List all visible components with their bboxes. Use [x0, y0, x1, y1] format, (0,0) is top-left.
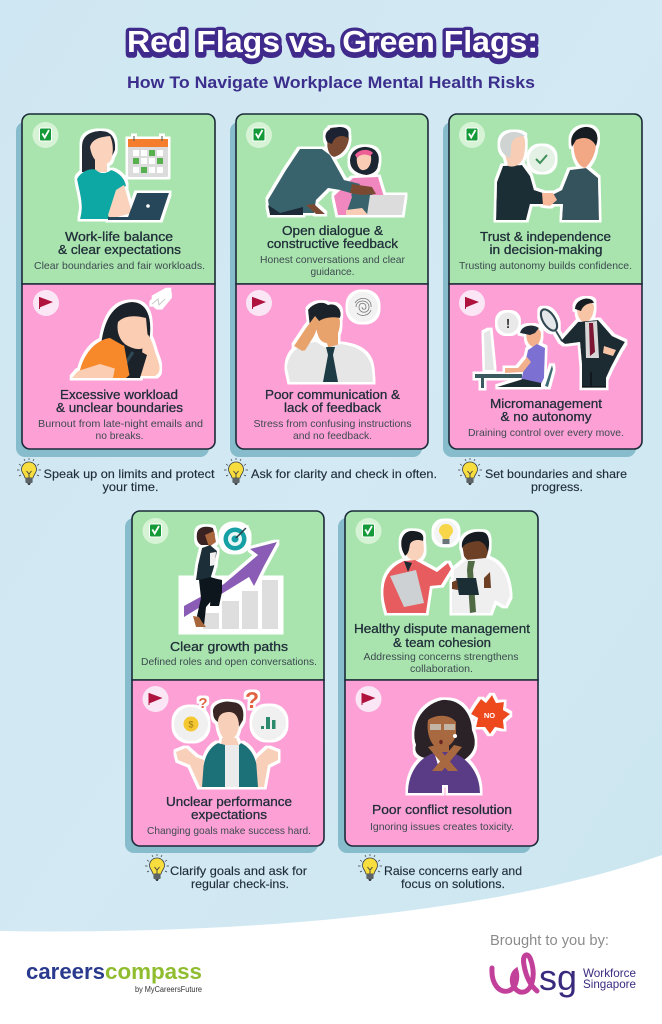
white footer wave — [0, 855, 662, 1024]
icon: red flag — [142, 686, 168, 712]
heading: lack of feedback — [284, 400, 382, 415]
illustration: colleague giving feedback — [268, 127, 405, 215]
tip: clarify goals — [145, 854, 307, 891]
logo: Workforce Singapore: sg — [539, 957, 577, 998]
tip: protect your time — [17, 458, 215, 494]
heading: Excessive workload — [60, 387, 178, 402]
icon: red flag — [33, 290, 59, 316]
illustration: manager with magnifier over worker — [475, 298, 625, 388]
illustration: shrugging man with question marks: ? — [198, 695, 208, 712]
heading — [480, 229, 611, 257]
logo: Careers Compass: by MyCareersFuture — [135, 985, 202, 994]
heading: Work-life balance — [65, 229, 173, 244]
heading — [490, 396, 602, 424]
description: collaboration. — [410, 663, 473, 675]
heading: Open dialogue & — [282, 223, 383, 238]
illustration: woman at laptop with calendar — [77, 131, 169, 220]
heading: & no autonomy — [500, 409, 592, 424]
heading: & unclear boundaries — [56, 400, 184, 415]
heading: Healthy dispute management — [354, 621, 530, 636]
description — [364, 651, 518, 675]
illustration: exhausted woman — [72, 294, 168, 378]
illustration: confused man with thought bubble — [287, 292, 378, 382]
tip: clarify goals: Clarify goals and ask for — [170, 864, 307, 878]
description — [38, 418, 203, 442]
heading: Poor communication & — [265, 387, 400, 402]
heading — [267, 223, 399, 251]
description: Stress from confusing instructions — [254, 418, 412, 430]
illustration: handshake between colleagues — [496, 127, 599, 220]
tip: ask for clarity — [224, 458, 437, 485]
icon: green check — [459, 122, 485, 148]
description: no breaks. — [96, 430, 144, 442]
tip: set boundaries: progress. — [531, 480, 583, 494]
heading: constructive feedback — [267, 236, 399, 251]
heading: Micromanagement — [490, 396, 602, 411]
illustration: shrugging man with question marks — [174, 687, 286, 787]
heading — [265, 387, 400, 415]
icon: green check — [142, 518, 168, 544]
sponsor label: Brought to you by: — [490, 932, 609, 949]
tip: ask for clarity: Ask for clarity and check in often. — [251, 467, 437, 481]
icon: green check — [32, 122, 58, 148]
icon: red flag — [246, 290, 272, 316]
heading: Trust & independence — [480, 229, 611, 244]
description: Ignoring issues creates toxicity. — [370, 821, 514, 833]
heading: Poor conflict resolution — [372, 802, 512, 817]
illustration: shrugging man with question marks: ? — [245, 687, 259, 713]
description — [254, 418, 412, 442]
description: Clear boundaries and fair workloads. — [34, 260, 205, 272]
heading — [166, 794, 292, 822]
panel: healthy dispute management vs poor conflict resolution — [338, 511, 538, 853]
panel: open dialogue vs poor communication — [230, 114, 428, 457]
heading: & clear expectations — [58, 242, 182, 257]
illustration: woman crossing arms saying no — [408, 695, 510, 793]
logo: Careers Compass — [26, 959, 202, 994]
heading: Clear growth paths — [170, 639, 289, 654]
description: Addressing concerns strengthens — [364, 651, 518, 663]
heading — [56, 387, 184, 415]
description: guidance. — [310, 266, 354, 278]
illustration: woman climbing growth chart — [181, 524, 281, 632]
tip: set boundaries — [458, 458, 627, 494]
illustration: manager with magnifier over worker: ! — [506, 316, 510, 331]
logo: Careers Compass: compass — [105, 959, 202, 984]
heading: & team cohesion — [393, 635, 491, 650]
panel: trust vs micromanagement — [443, 114, 642, 457]
illustration: two colleagues talking with light bulb — [383, 521, 510, 613]
description: Changing goals make success hard. — [147, 825, 311, 837]
tip: protect your time: your time. — [102, 480, 158, 494]
tip: clarify goals: regular check-ins. — [191, 877, 289, 891]
subtitle: How To Navigate Workplace Mental Health Risks — [127, 73, 535, 92]
logo: Careers Compass: careers — [26, 959, 105, 984]
heading — [354, 621, 530, 650]
heading — [58, 229, 182, 257]
heading: Unclear performance — [166, 794, 292, 809]
heading: expectations — [191, 807, 268, 822]
panel: work-life balance vs excessive workload — [16, 114, 215, 457]
description — [260, 254, 405, 278]
icon: red flag — [459, 290, 485, 316]
icon: green check — [246, 122, 272, 148]
illustration: shrugging man with question marks: $ — [188, 720, 194, 730]
description: Honest conversations and clear — [260, 254, 405, 266]
logo: Workforce Singapore: Singapore — [583, 977, 636, 991]
tip: raise concerns: focus on solutions. — [401, 877, 505, 891]
description: Burnout from late-night emails and — [38, 418, 203, 430]
tip: protect your time: Speak up on limits and protect — [44, 467, 215, 481]
tip: set boundaries: Set boundaries and share — [485, 467, 627, 481]
tip: raise concerns — [358, 854, 522, 891]
heading: in decision-making — [490, 242, 602, 257]
description: Trusting autonomy builds confidence. — [459, 260, 632, 272]
description: Draining control over every move. — [468, 427, 624, 439]
illustration: woman crossing arms saying no: NO — [484, 711, 495, 720]
icon: green check — [356, 518, 382, 544]
panel: clear growth paths vs unclear expectations — [125, 511, 324, 853]
description: and no feedback. — [293, 430, 372, 442]
logo: Workforce Singapore — [492, 955, 636, 998]
tip: raise concerns: Raise concerns early and — [384, 864, 522, 878]
title: Red Flags vs. Green Flags: — [127, 24, 538, 59]
logo: Workforce Singapore: Workforce — [583, 966, 636, 980]
icon: red flag — [356, 686, 382, 712]
description: Defined roles and open conversations. — [141, 656, 317, 668]
